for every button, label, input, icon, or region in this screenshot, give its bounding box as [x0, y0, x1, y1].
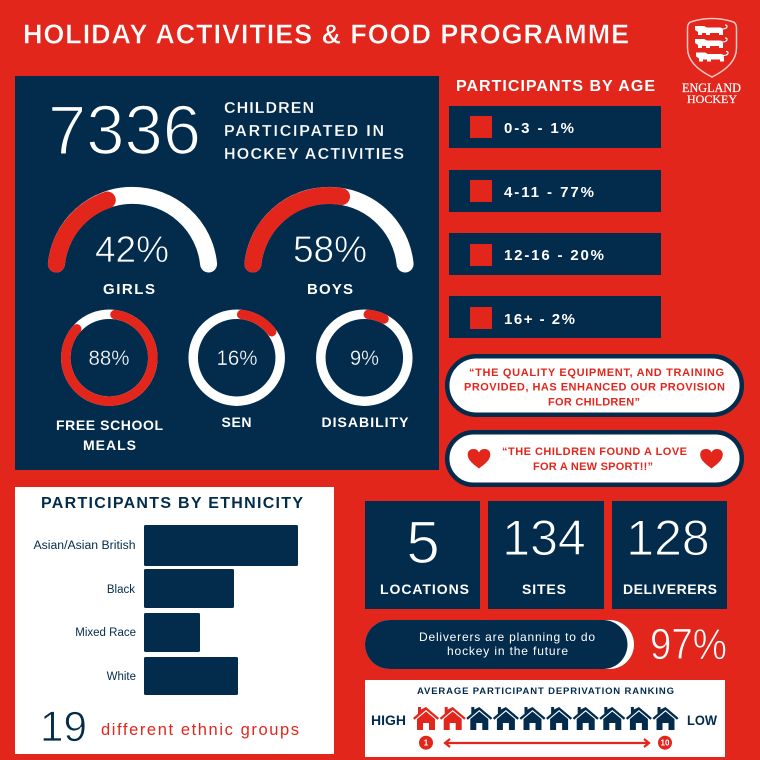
stat box: deliverers: DELIVERERS [623, 581, 717, 597]
panel: age band 4-11 [449, 170, 661, 212]
stat: 19 ethnic groups: different ethnic groups [101, 721, 299, 739]
gauge: girls 42% [56, 195, 209, 298]
stat: 97%: 97% [650, 620, 727, 669]
callout: quality equipment quote: “THE QUALITY EQUIPMENT, AND TRAINING [469, 367, 724, 379]
stat box: sites: 134 [502, 510, 586, 566]
marker: rank 1 [419, 736, 433, 750]
icon: shield [688, 18, 736, 77]
callout: love for a new sport quote: FOR A NEW SPORT!!” [533, 461, 653, 473]
marker: rank 10: 10 [661, 739, 670, 748]
donut: free school meals 88%: FREE SCHOOL [56, 417, 163, 433]
stat box: locations: 5 [406, 509, 440, 576]
logo wordmark: HOCKEY [687, 92, 737, 106]
gauge: girls 42%: 42% [95, 229, 169, 270]
logo wordmark [682, 81, 741, 106]
house scale: 1 to 10 [413, 707, 678, 730]
donut: disability 9%: DISABILITY [322, 414, 409, 430]
donut: free school meals 88%: MEALS [83, 437, 136, 453]
stat box: locations: LOCATIONS [380, 581, 469, 597]
panel: age band 0-3 [449, 106, 661, 148]
callout: quality equipment quote: FOR CHILDREN” [548, 396, 640, 408]
stat: 19 ethnic groups [40, 703, 299, 751]
headline number: 7336 [48, 91, 201, 169]
stat box: locations [365, 501, 480, 609]
headline description: CHILDREN [224, 100, 314, 117]
callout: love for a new sport quote [447, 432, 742, 485]
donut: SEN 16% [193, 314, 280, 430]
stat box: deliverers: 128 [626, 510, 710, 566]
marker: rank 1: 1 [424, 739, 429, 748]
gauge: boys 58% [253, 195, 405, 298]
donut: disability 9%: 9% [350, 347, 379, 370]
icon: heart left [468, 449, 490, 468]
stat box: sites: SITES [522, 581, 566, 597]
progress pill: deliverers planning hockey: Deliverers are planning to do [419, 630, 595, 644]
headline description: HOCKEY ACTIVITIES [224, 146, 404, 163]
donut: free school meals 88%: 88% [88, 347, 130, 370]
panel: age band 0-3: 0-3 - 1% [504, 120, 574, 137]
bar chart: ethnicity [34, 525, 298, 695]
panel: age band 16+ [449, 296, 661, 338]
bar chart: ethnicity: Asian/Asian British [34, 540, 136, 552]
panel: age band 12-16 [449, 233, 661, 275]
deprivation heading: AVERAGE PARTICIPANT DEPRIVATION RANKING [417, 686, 674, 697]
headline description [224, 100, 404, 163]
gauge: girls 42%: GIRLS [103, 281, 155, 298]
progress pill: deliverers planning hockey: hockey in the future [447, 644, 568, 658]
label: high: HIGH [371, 712, 406, 728]
panel: age band 16+: 16+ - 2% [504, 311, 575, 328]
donut: free school meals 88% [56, 314, 163, 453]
callout: quality equipment quote [447, 356, 742, 415]
arrow: scale direction [445, 739, 649, 747]
title: HOLIDAY ACTIVITIES & FOOD PROGRAMME [23, 18, 630, 50]
bar chart: ethnicity: Black [107, 584, 135, 596]
logo wordmark: ENGLAND [682, 81, 741, 95]
icon: heart right [700, 449, 723, 468]
bar chart: ethnicity: Mixed Race [75, 627, 136, 639]
callout: quality equipment quote: PROVIDED, HAS ENHANCED OUR PROVISION [464, 382, 725, 394]
ethnicity heading: PARTICIPANTS BY ETHNICITY [41, 495, 303, 512]
panel: participation summary [15, 76, 439, 470]
callout: love for a new sport quote: “THE CHILDREN FOUND A LOVE [502, 446, 687, 458]
donut: SEN 16%: 16% [216, 347, 258, 370]
stat: 19 ethnic groups: 19 [40, 703, 87, 751]
donut: disability 9% [321, 314, 409, 430]
headline description: PARTICIPATED IN [224, 123, 384, 140]
donut: SEN 16%: SEN [222, 414, 252, 430]
logo: England Hockey [682, 18, 741, 106]
bar chart: ethnicity: White [107, 671, 136, 683]
marker: rank 10 [658, 736, 672, 750]
stat box: deliverers [612, 501, 727, 609]
heading: participants by age: PARTICIPANTS BY AGE [456, 78, 655, 95]
panel: deprivation ranking [365, 680, 725, 757]
gauge: boys 58%: 58% [293, 229, 367, 270]
progress pill: deliverers planning hockey [365, 620, 634, 669]
label: low: LOW [687, 712, 718, 728]
panel: age band 4-11: 4-11 - 77% [504, 184, 594, 201]
stat box: sites [488, 501, 604, 609]
panel: participants by ethnicity [15, 487, 334, 754]
gauge: boys 58%: BOYS [307, 281, 353, 298]
panel: age band 12-16: 12-16 - 20% [504, 247, 604, 264]
